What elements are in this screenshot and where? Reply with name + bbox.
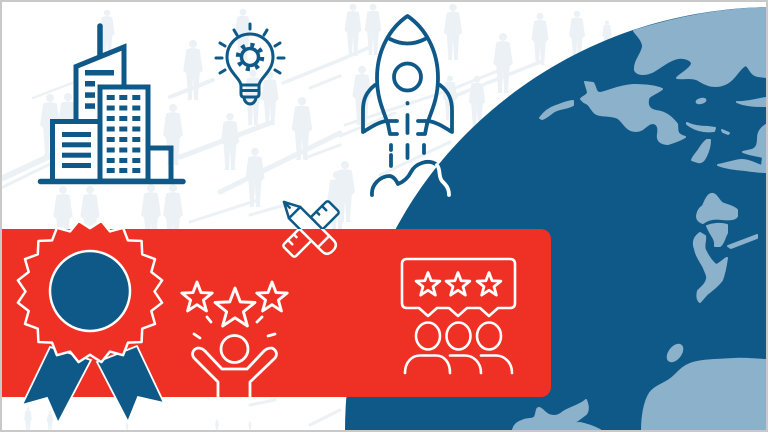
icon: celebrating person with stars bbox=[182, 282, 287, 397]
icon: crossed pencil and ruler bbox=[282, 200, 340, 258]
icon: award ribbon medal bbox=[18, 221, 164, 423]
medal rosette bbox=[18, 221, 162, 362]
red banner bbox=[2, 229, 551, 397]
globe bbox=[345, 7, 767, 431]
icon: light bulb with gear bbox=[216, 24, 284, 104]
medal ribbons bbox=[22, 346, 164, 423]
medal centre bbox=[50, 251, 130, 331]
icon: city buildings bbox=[40, 26, 183, 182]
icon: rocket bbox=[363, 16, 452, 195]
rocket exhaust cloud bbox=[372, 162, 437, 195]
background: silhouettes of people with long shadows bbox=[3, 4, 612, 431]
icon: group review with three stars bbox=[402, 259, 515, 373]
globe landmasses bbox=[513, 8, 766, 430]
